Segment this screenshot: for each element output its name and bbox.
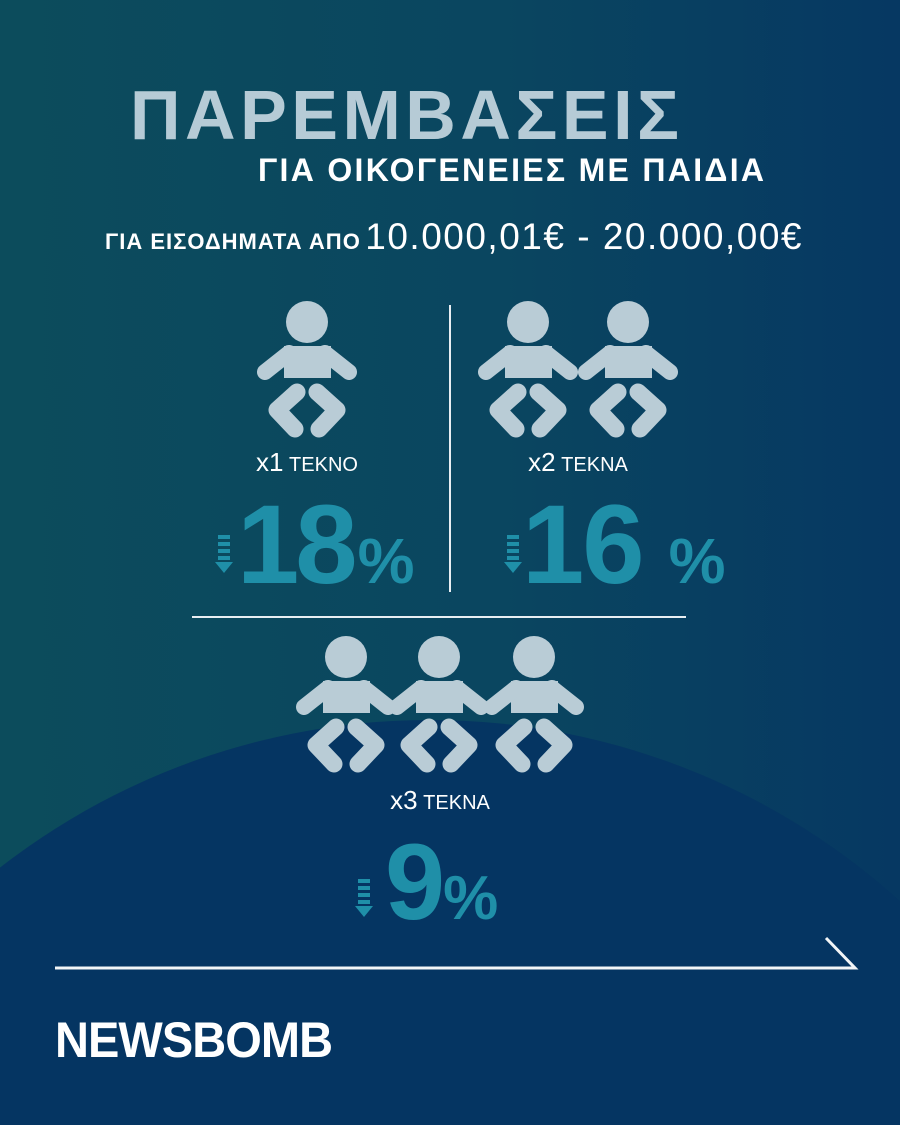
icon: three babies [296, 636, 584, 772]
icon: two babies [478, 301, 678, 438]
logo: NEWSBOMB: NEWSBOMB [55, 1012, 332, 1068]
panel: 1 child [215, 301, 414, 607]
percentage 9%: 9% [385, 821, 498, 942]
title: ΠΑΡΕΜΒΑΣΕΙΣ [130, 76, 684, 154]
label x1: x1 ΤΕΚΝΟ [256, 447, 358, 477]
subtitle: ΓΙΑ ΟΙΚΟΓΕΝΕΙΕΣ ΜΕ ΠΑΙΔΙΑ [258, 152, 766, 188]
label x2: x2 ΤΕΚΝΑ [528, 447, 628, 477]
percentage 16%: 16 % [522, 482, 725, 607]
label x3: x3 ΤΕΚΝΑ [390, 785, 490, 815]
panel: 3 children [296, 636, 584, 942]
icon: baby [257, 301, 357, 438]
panel: 2 children [478, 301, 725, 607]
percentage 18%: 18% [237, 482, 414, 607]
income range: ΓΙΑ ΕΙΣΟΔΗΜΑΤΑ ΑΠΟ 10.000,01€ - 20.000,00€ [105, 216, 803, 257]
arrow: bottom line [55, 937, 858, 970]
